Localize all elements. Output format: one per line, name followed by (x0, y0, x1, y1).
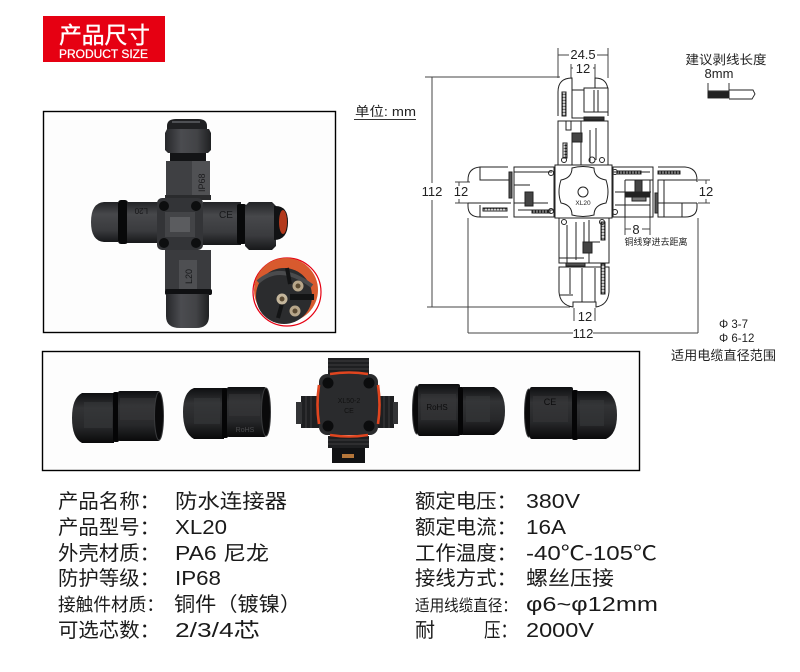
spec list: left column: 产品名称： (58, 490, 160, 513)
spec list: right column: 压： (484, 620, 517, 642)
technical drawing: dimensioned cross-section (422, 47, 713, 341)
connector: bottom arm (165, 250, 212, 328)
spec list: left column: PA6 尼龙 (175, 542, 269, 565)
panel: disassembled connector photo (42, 352, 640, 470)
spec list: left column: 防水连接器 (175, 490, 287, 513)
inset: connector terminal close-up (253, 258, 321, 326)
cable diameter range note: Φ 6-12 (719, 333, 754, 345)
spec list: left column: IP68 (175, 568, 221, 590)
connector: right arm (203, 202, 288, 250)
part: second cable gland (183, 387, 270, 439)
part: fourth cable gland: CE (544, 397, 556, 407)
wire strip length note: 8mm (705, 66, 733, 81)
cable diameter range note: 适用电缆直径范围 (671, 348, 776, 363)
drawing: left arm (468, 167, 554, 217)
spec list: right column: 2000V (526, 620, 595, 642)
title banner: product size (43, 16, 165, 62)
drawing: dimension labels: 12 (578, 309, 592, 324)
connector: right arm: CE (219, 210, 233, 221)
spec list: right column: 接线方式： (415, 567, 517, 590)
title banner: product size: 产品尺寸 (59, 22, 150, 48)
spec list: right column: 额定电压： (415, 490, 517, 513)
drawing: bottom arm (559, 218, 609, 307)
drawing: right arm (612, 167, 697, 218)
spec list: right column: 耐 (415, 619, 435, 642)
panel: assembled connector photo (44, 112, 336, 332)
connector: vertical top arm: IP68 (197, 173, 207, 192)
spec list: right column (415, 490, 658, 642)
drawing: dimension labels (422, 47, 713, 341)
part: central hub with orange seals (296, 358, 398, 463)
spec list: right column: 螺丝压接 (526, 567, 614, 590)
part: third cable gland: RoHS (426, 403, 448, 412)
icon: stripped wire (708, 83, 755, 99)
part: second cable gland: RoHS (236, 427, 255, 434)
spec list: right column: φ6~φ12mm (526, 594, 658, 616)
spec list: right column: 16A (526, 517, 567, 539)
connector: left arm: L20 (134, 206, 148, 215)
drawing: dimension labels: 24.5 (570, 47, 596, 62)
connector: vertical top arm (165, 119, 211, 200)
part: first cable gland (72, 391, 164, 443)
drawing: dimension labels: 112 (573, 326, 593, 341)
spec list: left column: 防护等级： (58, 567, 160, 590)
cable diameter range note: Φ 3-7 (719, 319, 748, 331)
spec list: left column: 铜件（镀镍） (174, 593, 301, 616)
drawing: dimension lines (425, 48, 710, 333)
drawing: central hub (555, 165, 612, 218)
spec list: left column (58, 490, 301, 642)
drawing: top arm (558, 78, 608, 165)
spec list: right column: 适用线缆直径： (415, 597, 517, 615)
connector: bottom arm: L20 (184, 269, 194, 284)
spec list: left column: 外壳材质： (58, 542, 160, 565)
drawing: dimension labels: 112 (422, 184, 442, 199)
unit label: 单位: mm (355, 104, 416, 119)
spec list: right column: -40℃-105℃ (526, 543, 657, 565)
spec list: left column: 可选芯数： (58, 619, 160, 642)
part: third cable gland (412, 384, 505, 436)
spec list: left column: XL20 (175, 517, 227, 539)
title banner: product size: PRODUCT SIZE (59, 47, 148, 61)
spec list: left column: 产品型号： (58, 516, 160, 539)
wire strip length note: 建议剥线长度 (686, 52, 767, 67)
spec list: left column: 接触件材质： (58, 595, 164, 615)
spec list: left column: 2/3/4芯 (175, 619, 260, 642)
wire strip length note (686, 52, 767, 99)
drawing: dimension labels: XL20 (575, 200, 591, 207)
connector: central hub (157, 198, 203, 250)
connector: left arm (91, 200, 158, 244)
part: central hub with orange seals: CE (344, 408, 354, 415)
part: fourth cable gland (524, 387, 617, 440)
drawing: dimension labels: 12 (576, 61, 590, 76)
drawing: dimension labels: 12 (454, 184, 468, 199)
drawing: dimension labels: 8 (632, 222, 640, 237)
drawing: dimension labels: 铜线穿进去距离 (624, 236, 688, 247)
cable diameter range note (671, 319, 776, 363)
spec list: right column: 380V (526, 491, 581, 513)
part: central hub with orange seals: XL50-2 (338, 398, 360, 405)
drawing: dimension labels: 12 (699, 184, 713, 199)
spec list: right column: 工作温度： (415, 542, 517, 565)
spec list: right column: 额定电流： (415, 516, 517, 539)
